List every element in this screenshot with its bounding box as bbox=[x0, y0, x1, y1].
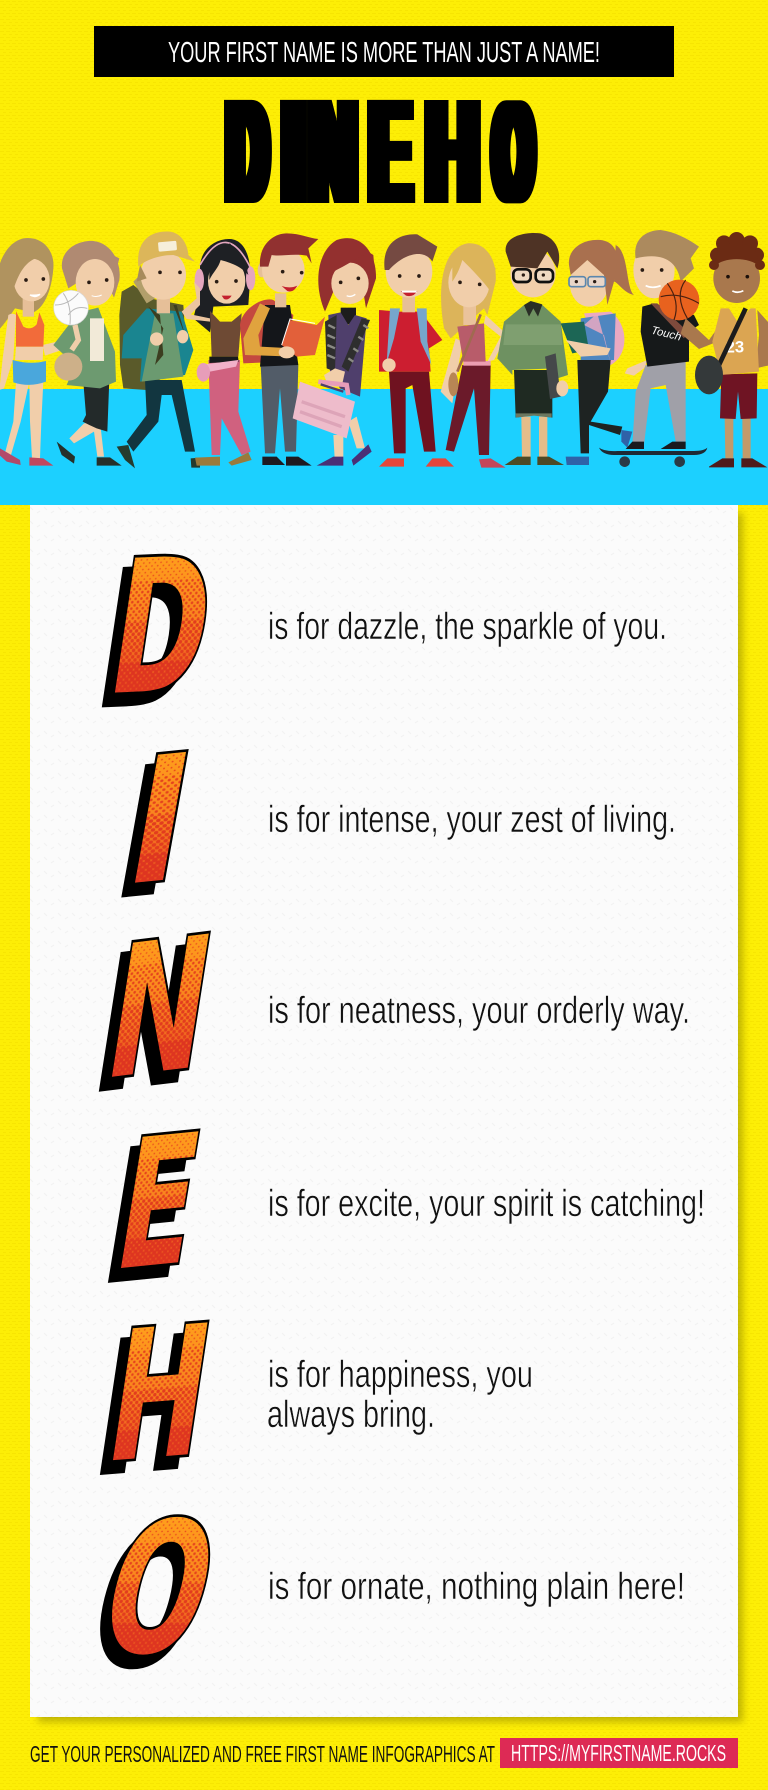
line: H: is for happiness, you bbox=[268, 1354, 533, 1396]
title: DINEHO: N bbox=[310, 71, 356, 232]
person 1: girl in orange top bbox=[0, 238, 82, 466]
letter H: H bbox=[96, 1286, 223, 1505]
letter E: E bbox=[93, 1106, 203, 1324]
person 11: boy on skateboard with basketball bbox=[599, 230, 707, 467]
letter I: I bbox=[103, 727, 195, 938]
title: DINEHO: E bbox=[370, 72, 411, 232]
letter I: I bbox=[114, 715, 206, 926]
letter D: D bbox=[98, 517, 225, 737]
person 12: curly-haired boy with tank top and shoulder bag bbox=[681, 232, 768, 467]
letter H: H bbox=[85, 1298, 212, 1517]
person 3: boy with cap and hiking backpack bbox=[117, 232, 200, 468]
person 8: blonde girl in burgundy jeans bbox=[441, 243, 507, 468]
letter O: O bbox=[83, 1483, 236, 1695]
title: DINEHO bbox=[227, 71, 533, 233]
letter N: N bbox=[94, 896, 225, 1122]
illustration: group of twelve young people, left half bbox=[0, 232, 376, 468]
line: H bbox=[267, 1354, 533, 1436]
person 7: boy in red shirt with blue straps bbox=[379, 234, 454, 467]
letter D: D bbox=[87, 529, 214, 749]
line: H: always bring. bbox=[267, 1394, 435, 1436]
person 4: girl with headphones bbox=[182, 239, 255, 466]
person 12: curly-haired boy with tank top and shoulder bag: 23 bbox=[726, 337, 744, 356]
heading banner bbox=[94, 26, 674, 77]
title: DINEHO: O bbox=[494, 75, 533, 231]
panel: acrostic card bbox=[30, 505, 738, 1717]
panel shadow bbox=[38, 513, 743, 1722]
person 2: girl with volleyball bbox=[53, 241, 122, 466]
letter O: O bbox=[73, 1495, 226, 1707]
person 10: girl with ponytail and blue glasses bbox=[561, 240, 634, 465]
letter E: E bbox=[104, 1094, 214, 1312]
person 5: boy with red backpack and book bbox=[240, 233, 325, 466]
person 9: boy with glasses and green sweater bbox=[497, 233, 568, 465]
blue floor band bbox=[0, 389, 768, 505]
illustration: group of twelve young people, right half bbox=[379, 230, 768, 468]
person 6: girl with pink handbag bbox=[293, 238, 376, 466]
letter N: N bbox=[83, 908, 214, 1134]
title: DINEHO: D bbox=[227, 72, 267, 233]
title: DINEHO: H bbox=[426, 72, 479, 233]
title: DINEHO: I bbox=[281, 71, 306, 232]
person 11: boy on skateboard with basketball: Touch bbox=[650, 325, 682, 344]
